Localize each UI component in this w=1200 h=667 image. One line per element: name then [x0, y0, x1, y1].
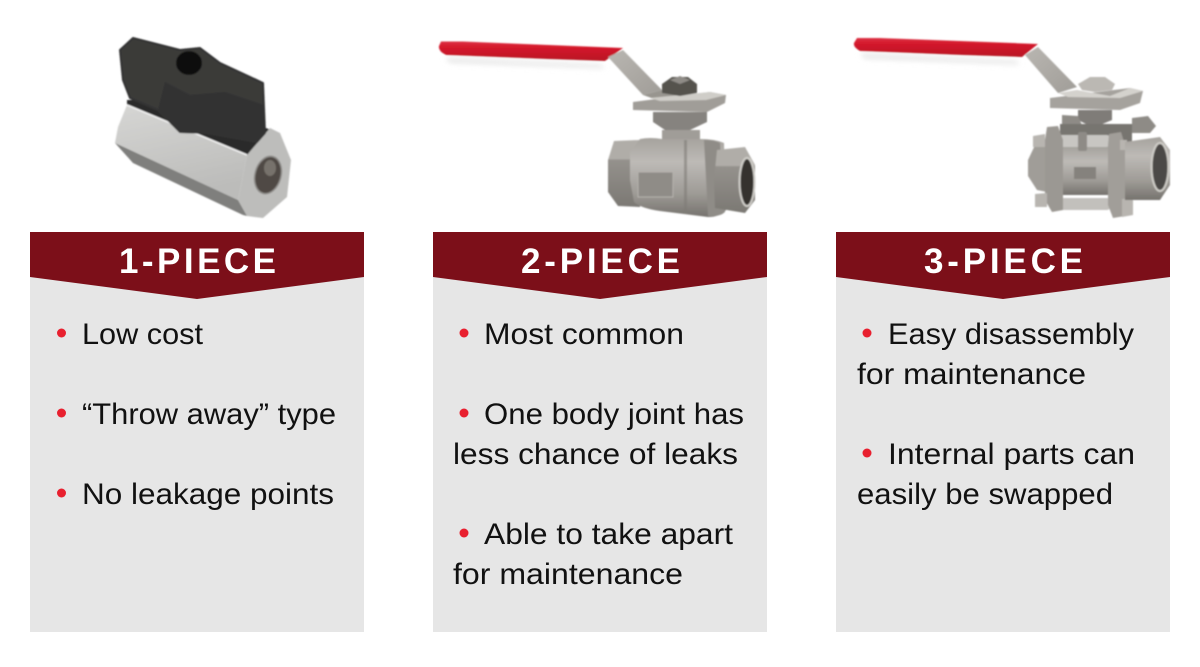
bullet list: Most common — [484, 318, 684, 351]
icon: 3-piece valve — [854, 38, 1170, 218]
upper rod — [1058, 135, 1110, 147]
handle shadow — [860, 54, 1021, 64]
heading: 2-PIECE — [521, 242, 680, 281]
handle hole — [176, 51, 202, 75]
stem nut — [662, 77, 697, 96]
collar — [704, 140, 725, 216]
threaded port — [740, 158, 754, 206]
bullet list: Easy disassembly — [888, 318, 1134, 351]
panel: 1-piece — [30, 232, 364, 632]
bullet list: easily be swapped — [857, 478, 1113, 511]
bullet list: Able to take apart — [484, 518, 734, 551]
shaded body behind rods — [1060, 124, 1132, 148]
left flange — [1045, 126, 1063, 212]
stem — [1078, 110, 1112, 125]
right end — [1125, 137, 1170, 200]
threaded port — [1152, 143, 1168, 191]
plate top face — [650, 92, 726, 101]
header banner — [836, 232, 1170, 299]
nameplate — [638, 172, 673, 197]
top plate — [633, 92, 726, 112]
center body — [1060, 147, 1110, 195]
body top edge highlight — [127, 105, 247, 155]
right flange — [1108, 132, 1125, 218]
left end — [1028, 143, 1047, 192]
rod spacer — [1078, 132, 1087, 151]
metal lever — [1025, 47, 1077, 93]
left upper lug — [1062, 115, 1084, 131]
lower rod — [1060, 198, 1110, 210]
black wing handle — [120, 38, 265, 142]
bullet list — [57, 318, 336, 511]
bullet list: One body joint has — [484, 398, 744, 431]
header banner — [433, 232, 767, 299]
neck — [662, 130, 700, 152]
panel: 2-piece — [433, 232, 767, 632]
panel background — [836, 232, 1170, 632]
right hex end — [714, 147, 755, 213]
left hex end — [608, 140, 640, 207]
icon: 1-piece valve — [115, 38, 291, 218]
heading: 1-PIECE — [119, 242, 276, 281]
header banner — [30, 232, 364, 299]
bullet list: “Throw away” type — [82, 398, 336, 431]
handle shadow — [445, 58, 606, 68]
icon: 2-piece valve — [439, 42, 755, 217]
bullet list: Internal parts can — [888, 438, 1135, 471]
bullet list: Low cost — [82, 318, 204, 351]
lever end — [643, 90, 690, 101]
port highlight — [264, 160, 276, 176]
panel background — [433, 232, 767, 632]
dark gap under handle — [127, 100, 272, 156]
stem nut — [1078, 77, 1115, 92]
top plate — [1050, 88, 1143, 110]
plate top face — [1058, 88, 1143, 98]
right upper lug — [1132, 116, 1156, 133]
body joint — [684, 140, 687, 214]
end ring — [238, 128, 291, 218]
body main facet — [115, 105, 247, 200]
metal lever — [608, 50, 662, 95]
heading: 3-PIECE — [924, 242, 1083, 281]
handle shading — [158, 82, 265, 142]
panel: 3-piece — [836, 232, 1170, 632]
nut top — [670, 76, 690, 84]
center marking — [1074, 167, 1096, 179]
bullet list: for maintenance — [857, 358, 1086, 391]
bullet list: No leakage points — [82, 478, 334, 511]
bolt heads — [1033, 134, 1133, 217]
threaded port — [251, 153, 285, 197]
bullet list: less chance of leaks — [453, 438, 738, 471]
stop collar — [653, 112, 707, 130]
bullet list — [453, 318, 744, 591]
red handle grip — [854, 38, 1038, 57]
body lower facet — [115, 143, 247, 216]
red handle grip — [439, 42, 623, 61]
main body — [630, 138, 726, 217]
bullet list — [857, 318, 1135, 511]
panel background — [30, 232, 364, 632]
bullet list: for maintenance — [453, 558, 683, 591]
